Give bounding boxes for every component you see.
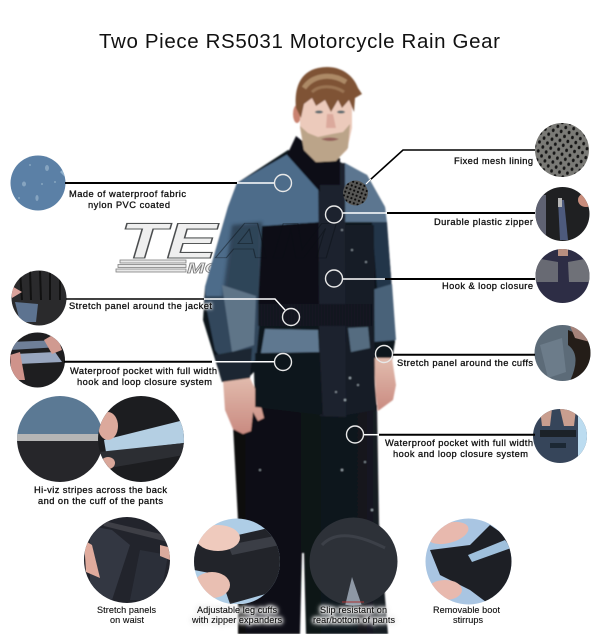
marker bbox=[274, 174, 292, 192]
label: Slip resistant on bbox=[320, 605, 387, 615]
leader line bbox=[370, 150, 535, 180]
callout: stretch panel around the jacket bbox=[10, 270, 300, 326]
label: Fixed mesh lining bbox=[454, 156, 533, 166]
icon: leg cuff bbox=[194, 518, 280, 604]
neck collar front bbox=[316, 158, 340, 185]
label: rear/bottom of pants bbox=[313, 615, 395, 625]
callout: durable plastic zipper bbox=[326, 186, 594, 242]
icon: pants seat bbox=[310, 518, 398, 606]
pants bbox=[233, 405, 388, 634]
beard bbox=[300, 124, 350, 162]
waist elastic bbox=[258, 304, 372, 326]
icon: stretch panel bbox=[10, 270, 68, 326]
marker bbox=[274, 354, 292, 370]
leader line bbox=[66, 298, 204, 300]
label: Stretch panels bbox=[97, 605, 156, 615]
label bbox=[313, 605, 395, 625]
label: with zipper expanders bbox=[191, 615, 282, 625]
mouth bbox=[321, 138, 339, 141]
label bbox=[385, 438, 533, 459]
feature: hi-viz stripes bbox=[17, 396, 184, 506]
label: stirrups bbox=[453, 615, 483, 625]
nose shadow bbox=[326, 114, 336, 128]
label bbox=[97, 605, 156, 625]
callout: waterproof fabric bbox=[8, 153, 292, 213]
marker bbox=[376, 346, 392, 362]
label: Hook & loop closure bbox=[442, 281, 533, 291]
feature: slip resistant seat bbox=[310, 518, 398, 625]
right hand bbox=[374, 358, 396, 411]
label: and on the cuff of the pants bbox=[38, 496, 163, 506]
label bbox=[69, 189, 186, 210]
watermark logo bbox=[116, 213, 338, 277]
left sleeve cuff bbox=[215, 348, 252, 382]
icon: cuff stripe bbox=[98, 396, 184, 482]
left pocket flap bbox=[261, 329, 319, 353]
label: on waist bbox=[110, 615, 144, 625]
callout: waterproof pocket left bbox=[8, 332, 292, 388]
leader line bbox=[393, 354, 535, 356]
hair bbox=[296, 67, 362, 118]
label: Durable plastic zipper bbox=[434, 217, 533, 227]
pocket lower bbox=[255, 353, 323, 415]
callout: hook and loop closure bbox=[326, 248, 592, 304]
feature: adjustable leg cuffs bbox=[191, 518, 282, 625]
leader line bbox=[387, 212, 535, 214]
label bbox=[34, 485, 167, 506]
marker bbox=[346, 426, 364, 443]
right shoulder panel bbox=[345, 163, 387, 222]
icon: pocket bbox=[8, 332, 68, 388]
callout: waterproof pocket right bbox=[346, 409, 588, 463]
leader line bbox=[379, 434, 535, 436]
label bbox=[433, 605, 500, 625]
label: hook and loop closure system bbox=[77, 377, 212, 387]
icon: mesh bbox=[535, 123, 589, 177]
inset: mesh on chest bbox=[343, 180, 368, 206]
feature: stretch panels on waist bbox=[84, 517, 172, 625]
lower right body wet sheen bbox=[346, 225, 375, 415]
feature: removable boot stirrups bbox=[425, 518, 512, 625]
model wearing rain gear bbox=[203, 67, 396, 634]
label: Adjustable leg cuffs bbox=[197, 605, 277, 615]
icon: zipper bbox=[536, 187, 590, 241]
right pocket flap bbox=[348, 327, 370, 352]
label: Stretch panel around the jacket bbox=[69, 301, 212, 311]
label: Waterproof pocket with full width bbox=[70, 366, 217, 376]
icon: back stripe bbox=[17, 396, 103, 483]
marker bbox=[326, 270, 342, 287]
left sleeve shadow bbox=[222, 222, 262, 300]
label: Removable boot bbox=[433, 605, 500, 615]
label: hook and loop closure system bbox=[393, 449, 528, 459]
label: Stretch panel around the cuffs bbox=[397, 358, 533, 368]
title: Two Piece RS5031 Motorcycle Rain Gear bbox=[99, 30, 500, 53]
leader line bbox=[385, 278, 535, 280]
label: Hi-viz stripes across the back bbox=[34, 485, 167, 495]
callout: fixed mesh lining bbox=[366, 123, 589, 184]
callout: stretch panel around the cuffs bbox=[376, 325, 592, 381]
hair highlights bbox=[304, 76, 346, 88]
eyes bbox=[315, 110, 345, 114]
label: Waterproof pocket with full width bbox=[385, 438, 533, 448]
watermark logo: MOTORCYCLE bbox=[187, 260, 338, 277]
label: Made of waterproof fabric bbox=[69, 189, 186, 199]
left shoulder and sleeve panel bbox=[205, 154, 322, 300]
icon: cuff bbox=[534, 325, 592, 381]
icon: water beaded fabric bbox=[10, 156, 66, 210]
right sleeve bbox=[372, 222, 392, 300]
jacket base bbox=[203, 150, 395, 417]
label: nylon PVC coated bbox=[88, 200, 170, 210]
collar bbox=[287, 136, 340, 192]
label bbox=[191, 605, 282, 625]
label bbox=[70, 366, 217, 387]
water drops bbox=[259, 229, 373, 511]
watermark overlay on jacket: TEAM bbox=[120, 213, 337, 269]
leader line bbox=[64, 361, 212, 363]
icon: waist bbox=[84, 517, 172, 603]
left hand bbox=[223, 376, 264, 434]
leader line bbox=[65, 182, 237, 184]
front placket bbox=[318, 163, 346, 417]
dark chest bbox=[258, 222, 322, 305]
ear bbox=[293, 105, 301, 123]
marker bbox=[326, 206, 342, 223]
head bbox=[300, 95, 352, 162]
watermark logo: TEAM bbox=[120, 213, 337, 269]
marker bbox=[282, 308, 300, 326]
icon: pants pocket bbox=[532, 409, 588, 463]
icon: hook and loop jacket bbox=[536, 249, 590, 303]
icon: stirrup bbox=[425, 518, 512, 605]
left lower sleeve panel bbox=[204, 296, 262, 372]
